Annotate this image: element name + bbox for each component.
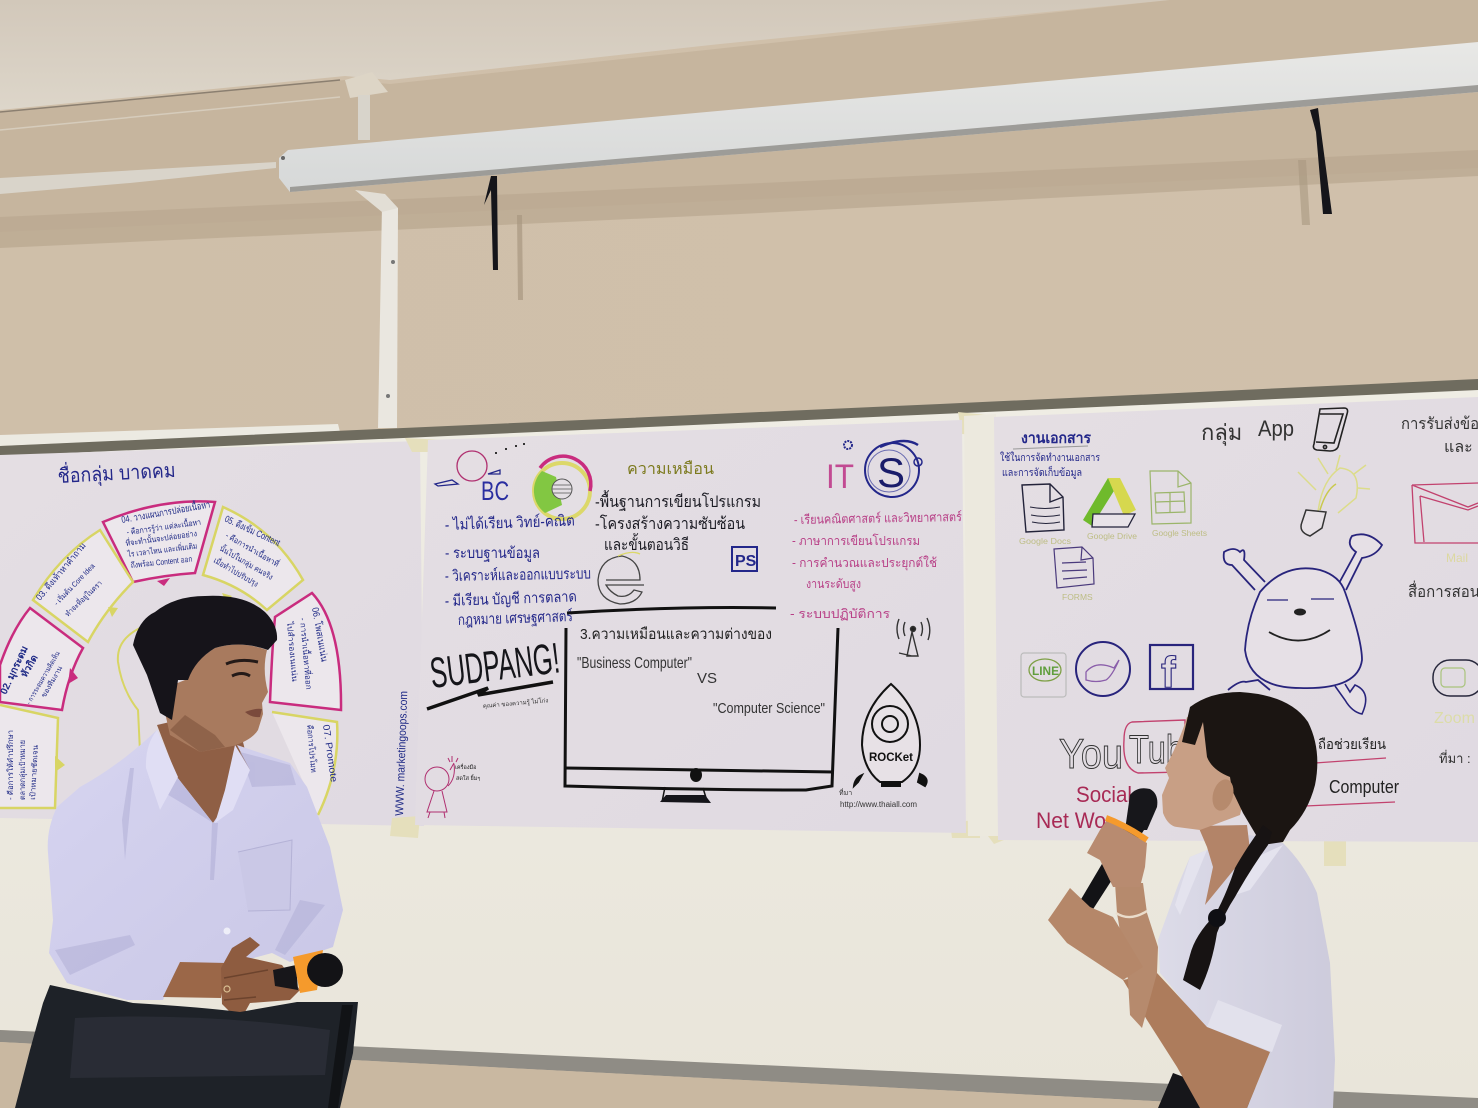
wheel segment 01: เป้าหมายชัดเจน [28, 745, 40, 800]
source note: ที่มา [839, 788, 852, 797]
wheel segment 01: - คือการให้คำปรึกษา [6, 730, 15, 800]
heading: documents [1000, 430, 1100, 479]
wheel segment 03: 03. ดึงเท้าหาคำถาม [34, 541, 88, 602]
microphone man [273, 950, 343, 993]
office chair [15, 985, 358, 1108]
wheel segment 02 [0, 608, 83, 710]
icon: S logo [865, 441, 922, 497]
face [160, 644, 268, 752]
icon: Google Sheets: Google Sheets [1152, 528, 1207, 538]
screen label: VS: VS [697, 670, 717, 687]
icon: S logo: S [877, 449, 905, 496]
bracelet [1116, 911, 1147, 917]
vertical white conduit [355, 95, 398, 428]
projector screen housing [279, 42, 1478, 192]
wheel segment 04: - คือการรู้ว่า แต่ละเนื้อหา [126, 516, 202, 538]
screen title: 3.ความเหมือนและความต่างของ [580, 626, 772, 643]
whiteboard bottom tray [0, 1030, 1478, 1108]
icon: gear [844, 441, 852, 449]
strap shadow left [517, 215, 523, 300]
white trim above board [0, 424, 340, 446]
shirt pocket [238, 840, 292, 911]
wheel segment 02: ของทีมงาน [40, 665, 64, 699]
icon: Zoom [1433, 660, 1478, 727]
icon: rocket: ROCKet [869, 752, 913, 764]
wheel segment 04 [103, 498, 215, 586]
face [1162, 717, 1250, 830]
screen label: Computer Science: "Computer Science" [713, 700, 825, 717]
skirt [1158, 1073, 1260, 1108]
panel: right poster, apps group [994, 397, 1478, 842]
source url: WWW. marketingoops.com [394, 691, 410, 816]
heading: IT: IT [826, 458, 854, 496]
wheel segment 06: ไปสำรองเนแน่น [285, 620, 299, 683]
icon: LINE: LINE [1032, 664, 1059, 678]
icon: IE letter e [598, 552, 644, 604]
icon: PS box: PS [735, 553, 757, 570]
shirt shadows [55, 752, 325, 975]
wheel segment 05: - คือการนำเนื้อหาที่ [224, 529, 281, 569]
braid [1183, 825, 1272, 990]
source note [839, 788, 917, 809]
jaw shadow [170, 715, 225, 752]
icon: Facebook [1150, 645, 1193, 697]
icon: BC balloon cloud [435, 444, 525, 486]
neck [157, 715, 250, 823]
icon: stick figure [425, 756, 458, 818]
icon: coloured globe [534, 456, 591, 519]
hair [1182, 692, 1317, 845]
logo: YouTube: Tub [1129, 728, 1184, 772]
logo text: SUDPANG [427, 634, 562, 710]
wheel segment 06 [270, 593, 341, 710]
icon: Facebook: f [1161, 648, 1176, 697]
collar right [215, 745, 250, 823]
wheel segment 04: ไร เวลาไหน และเพิ่มเติม [126, 540, 198, 559]
wheel segment 02: หัวกิด [18, 653, 41, 680]
wheel segment 02: - การระดมความคิดเห็น [24, 649, 62, 706]
source note: http://www.thaiall.com [840, 800, 917, 809]
icon: Google Sheets [1150, 471, 1207, 538]
shirt [1158, 835, 1335, 1108]
wheel segment 05: เมื่อทำไปปรับปรุง [212, 554, 261, 589]
person: presenter woman [1048, 692, 1335, 1108]
list: BC column: - วิเคราะห์และออกแบบระบบ [445, 565, 591, 585]
heading: App group: App [1258, 416, 1294, 441]
label: Social Network [1036, 782, 1132, 833]
heading: documents: งานเอกสาร [1021, 430, 1092, 447]
wheel segment 03: ทำจะที่อยู่ในตรา [62, 578, 104, 618]
lips [245, 709, 262, 717]
iMac drawing [565, 608, 838, 803]
microphone woman [1067, 788, 1157, 923]
screen pull strap right [1310, 108, 1332, 214]
paper strip between posters [964, 414, 1000, 836]
hand on microphone [1087, 820, 1147, 887]
list: IT column: งานระดับสูง [806, 577, 861, 592]
wheel segment 03 [33, 530, 133, 642]
hands [221, 937, 300, 1014]
icon: Zoom: Zoom [1434, 710, 1475, 727]
ceiling beam [0, 0, 1478, 248]
upper arm and forearm [1123, 973, 1270, 1108]
list: IT column: - การคำนวณและประยุกต์ใช้ [792, 556, 937, 571]
wheel segment 06: 06. โพสเนแน่น [309, 606, 330, 663]
right column text [1401, 415, 1478, 766]
hair [133, 596, 277, 720]
shirt collar [146, 730, 178, 810]
heading: documents: และการจัดเก็บข้อมูล [1002, 465, 1082, 479]
icon: Google Drive [1083, 478, 1137, 541]
note beside figure line two: สดใส ยิ้มๆ [456, 774, 480, 782]
hair bow [1208, 909, 1226, 927]
ceiling [0, 0, 1170, 110]
list: IT column: - ภาษาการเขียนโปรแกรม [792, 533, 920, 548]
eyebrow [226, 660, 258, 664]
forearm [163, 962, 227, 998]
logo: YouTube: You [1059, 730, 1123, 777]
list: IT column: - ระบบปฏิบัติการ [790, 607, 890, 621]
icon: LINE [1021, 653, 1066, 697]
icon: light bulb [1298, 455, 1370, 536]
icon: Twitter [1076, 642, 1130, 696]
wheel segment 05 [203, 507, 303, 610]
list: BC column [445, 511, 591, 629]
apple logo [690, 768, 702, 782]
icon: Google Forms: FORMS [1062, 592, 1093, 602]
heading: App group: กลุ่ม [1201, 420, 1242, 446]
whiteboard [0, 385, 1478, 1103]
list: BC column: - ไม่ได้เรียน วิทย์-คณิต [445, 511, 575, 534]
list: BC column: กฎหมาย เศรษฐศาสตร์ [458, 608, 573, 629]
wheel segment 05: นั้นไปในกลุ่ม คนจริง [218, 542, 276, 582]
note beside figure: เครื่องมือ [455, 763, 476, 771]
logo: YouTube [1059, 720, 1185, 777]
wheel segment 04: ถึงพร้อม Content ออก [130, 555, 193, 570]
label: phone for learning: ถือช่วยเรียน [1318, 736, 1386, 752]
wheel segment 04: ที่จะทำนั้นจะปล่อยอย่าง [125, 527, 198, 548]
screen pull strap left [484, 176, 498, 270]
tape strips [390, 412, 1346, 866]
icon: rocket [854, 684, 927, 786]
icon: Google Forms [1054, 547, 1094, 602]
screen label: Business Computer: "Business Computer" [577, 655, 692, 672]
person: presenter man [48, 596, 343, 1014]
wheel segment 03: - เริ่มต้น Core Idea [51, 560, 97, 607]
collar [1175, 845, 1283, 915]
wheel segment 04: 04. วางแผนการปล่อยเนื้อหา [120, 498, 211, 526]
icon: antenna [897, 618, 930, 656]
list: BC column: - ระบบฐานข้อมูล [445, 545, 540, 562]
wheel segment 06: - การนำเนื้อหาที่ออก [298, 617, 315, 690]
eye [232, 674, 250, 676]
list: IT column [790, 510, 962, 621]
wheel segment 01 [0, 705, 65, 808]
label: Social Network: Net Wo [1036, 808, 1106, 833]
wheel segment 07: 07. Promote [320, 724, 339, 783]
lower hand [1048, 888, 1143, 980]
icon: Gmail [1412, 483, 1478, 565]
forearm holding microphone [1115, 883, 1158, 1028]
orange microphone collar [1106, 818, 1147, 840]
icon: mascot character [1224, 534, 1382, 714]
neck [1198, 825, 1250, 905]
wheel segment 07 [272, 712, 339, 815]
shirt buttons [224, 928, 230, 934]
wheel segment 07: คือการโปรโมท [305, 724, 319, 773]
whiteboard top frame [0, 379, 1478, 456]
logo text: SUDPANG: SUDPANG! [427, 634, 562, 698]
ear [160, 669, 176, 695]
strap shadow right [1298, 160, 1310, 225]
ring [224, 986, 230, 992]
icon: Google Drive: Google Drive [1087, 531, 1137, 541]
floor-level wall [0, 1042, 1290, 1108]
heading: documents: ใช้ในการจัดทำงานเอกสาร [1000, 451, 1100, 464]
heading: BC: BC [481, 476, 509, 506]
sleeve seam [1207, 1000, 1282, 1052]
list: IT column: - เรียนคณิตศาสตร์ และวิทยาศาสตร์ [794, 510, 962, 527]
finger highlight [224, 970, 268, 1000]
label: Computer [1305, 777, 1399, 806]
icon: PS box [732, 547, 757, 571]
panel: centre poster, similarity and difference [415, 420, 966, 833]
label: Social Network: Social [1076, 782, 1132, 807]
shirt [48, 730, 343, 1000]
wheel segment 01: ตลาดกลุ่มเป้าหมาย [18, 740, 27, 800]
icon: phone [1313, 408, 1348, 451]
wheel segment 05: 05. ดึงเข้ม Content [223, 514, 282, 549]
icon: Google Docs [1019, 484, 1071, 546]
panel: left poster, content marketing wheel [0, 441, 424, 826]
heading: group name: ชื่อกลุ่ม บาดคม [57, 456, 176, 489]
right column text: และ [1444, 439, 1473, 456]
label: Computer: Computer [1329, 777, 1399, 797]
list: similarities [595, 490, 761, 554]
label: phone for learning [1315, 736, 1386, 763]
ear [1209, 777, 1237, 813]
icon: Gmail: Mail [1446, 551, 1468, 565]
heading: similarities: ความเหมือน [627, 460, 714, 478]
heading: App group [1201, 416, 1294, 446]
icon: Google Docs: Google Docs [1019, 536, 1071, 546]
list: BC column: - มีเรียน บัญชี การตลาด [445, 588, 577, 610]
logo text: SUDPANG: คุณค่า ของความรู้ ไม่โก่ง [482, 696, 549, 710]
list: similarities: และขั้นตอนวิธี [604, 533, 689, 554]
list: similarities: -โครงสร้างความซับซ้อน [595, 514, 745, 533]
list: similarities: -พื้นฐานการเขียนโปรแกรม [595, 490, 761, 511]
head silhouette outline [118, 628, 140, 752]
right column text: ที่มา : [1439, 750, 1471, 766]
